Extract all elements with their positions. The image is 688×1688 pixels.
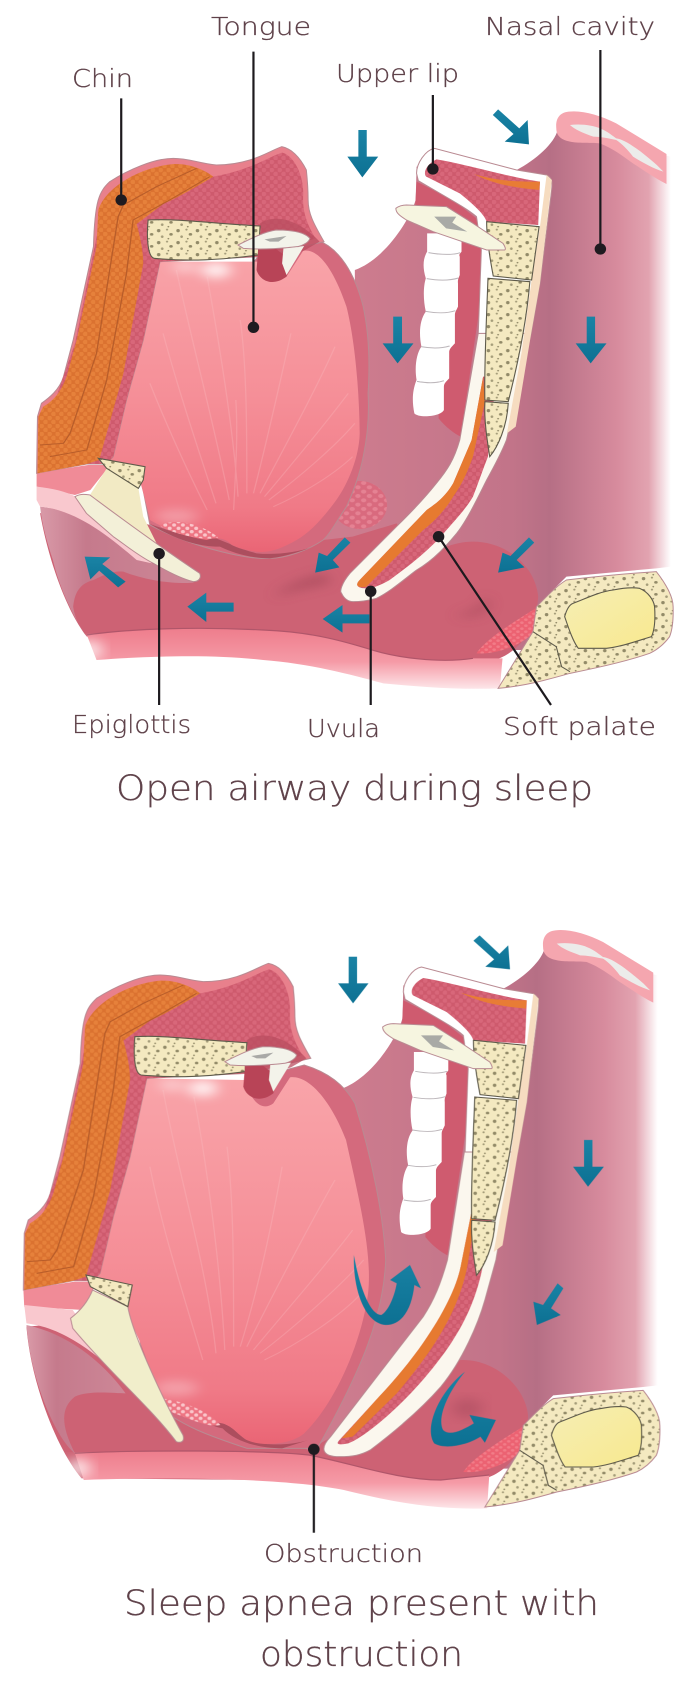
label: Upper lip: Upper lip xyxy=(336,59,459,88)
panel: sleep apnea illustration xyxy=(23,930,660,1533)
tongue base patch xyxy=(160,522,218,539)
tonsil xyxy=(332,481,387,529)
tongue base patch xyxy=(158,1398,220,1426)
tongue highlights xyxy=(154,1080,218,1396)
enlarged tongue xyxy=(93,1077,369,1444)
soft palate xyxy=(341,333,531,602)
chin, lower lip, jaw bone and lower tooth xyxy=(37,147,324,473)
tongue outer rim xyxy=(132,240,369,559)
caption: open airway: Open airway during sleep xyxy=(116,769,593,809)
dark fold under tongue xyxy=(156,1398,309,1448)
lower soft tissue strip xyxy=(87,628,503,689)
epiglottis xyxy=(71,1275,184,1442)
pale ledge above epiglottis cavity xyxy=(24,1305,132,1387)
caption: sleep apnea: obstruction xyxy=(260,1635,463,1675)
strip top edge xyxy=(87,628,473,660)
enlarged tongue outer rim xyxy=(128,1065,386,1448)
back of nasal cavity, throat wall, upper gum and teeth xyxy=(273,930,658,1469)
upper lip, hard palate bones and upper tooth xyxy=(396,148,552,457)
lower soft tissue strip xyxy=(75,1451,489,1509)
label: Uvula: Uvula xyxy=(307,714,380,743)
caption: sleep apnea: Sleep apnea present with xyxy=(124,1584,599,1624)
pharynx floor and soft swelling xyxy=(40,500,538,665)
strip left fade xyxy=(66,1458,91,1478)
pale ledge above epiglottis cavity xyxy=(37,487,152,563)
tissue below chin xyxy=(23,1282,97,1310)
label: Tongue: Tongue xyxy=(211,12,311,41)
tongue xyxy=(106,250,360,552)
label: Soft palate: Soft palate xyxy=(503,712,656,741)
tissue below chin xyxy=(37,465,110,495)
label: Epiglottis: Epiglottis xyxy=(72,710,191,739)
tongue muscle fibres xyxy=(150,270,355,510)
tongue muscle fibres xyxy=(150,1090,364,1360)
cranial base bone xyxy=(463,1390,660,1507)
label: Chin: Chin xyxy=(72,64,133,93)
tongue highlights xyxy=(154,262,231,523)
fold shading in airway xyxy=(273,573,490,617)
mauve cavity beside epiglottis xyxy=(26,1325,126,1453)
fold shading near swelling xyxy=(452,1398,483,1418)
soft palate against the tongue xyxy=(324,1133,518,1457)
label: Obstruction: Obstruction xyxy=(264,1539,423,1568)
obstruction leader line and dot xyxy=(308,1444,320,1533)
mauve cavity beside epiglottis xyxy=(40,507,194,637)
label: Nasal cavity: Nasal cavity xyxy=(485,12,655,41)
strip top edge xyxy=(75,1451,489,1480)
upper lip, hard palate bones and upper tooth xyxy=(383,967,539,1275)
panel: open airway illustration xyxy=(37,50,673,705)
back of nasal cavity, throat wall, upper gum and teeth xyxy=(287,111,671,650)
cranial base bone xyxy=(477,572,673,688)
epiglottis xyxy=(75,458,200,582)
airflow arrows and turbulent curved arrows xyxy=(338,935,604,1446)
label leader lines and dots xyxy=(115,50,606,705)
chin, lower lip, jaw bone and lower tooth xyxy=(23,963,311,1290)
airflow arrows xyxy=(85,109,607,633)
strip left fade xyxy=(78,640,103,660)
dark fold under tongue xyxy=(150,524,313,558)
pharynx floor and soft swelling xyxy=(26,1323,528,1482)
